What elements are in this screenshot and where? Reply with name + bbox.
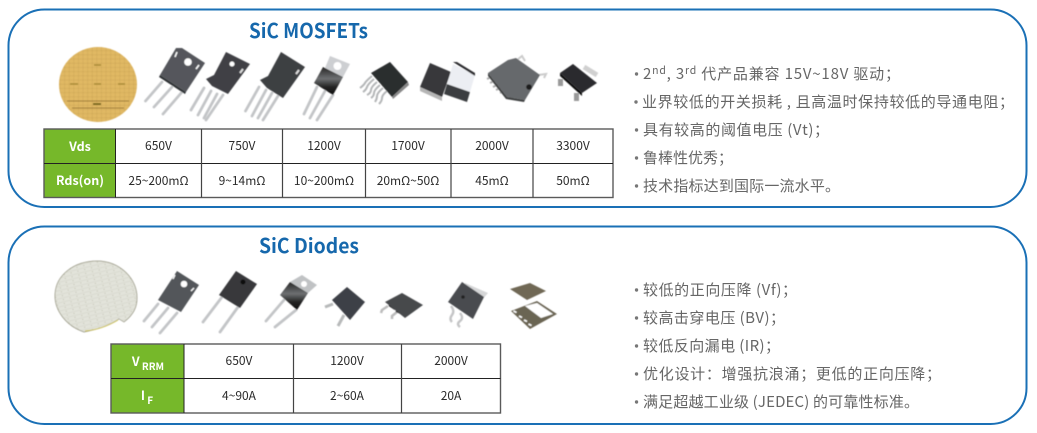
table: Vds and Rds(on): 25~200mΩ — [128, 172, 189, 189]
table: Vds and Rds(on): 2000V — [475, 137, 509, 154]
icon: TO-247 three-lead package — [146, 48, 205, 114]
table: Vds and Rds(on): 3300V — [556, 137, 590, 154]
icon: SOT-223 package — [558, 64, 597, 101]
icon: TO-247 diode two-lead — [203, 271, 257, 332]
table: VRRM and IF: 4~90A — [222, 387, 257, 404]
icon: TO-247 four-lead package A — [191, 52, 250, 120]
table: VRRM and IF: 1200V — [330, 352, 364, 369]
table: Vds and Rds(on): 50mΩ — [556, 172, 590, 189]
table: VRRM and IF: 2~60A — [330, 387, 365, 404]
icon: DPAK diode B — [381, 293, 423, 319]
heading: SiC Diodes: SiC Diodes — [259, 230, 359, 259]
text block: MOSFET features: rd — [685, 63, 696, 78]
heading: SiC MOSFETs: SiC MOSFETs — [249, 15, 368, 44]
table header: IF: F — [145, 392, 153, 407]
panel: SiC MOSFETs — [8, 10, 1026, 207]
text block: MOSFET features — [634, 63, 1014, 196]
table: Vds and Rds(on): 45mΩ — [475, 172, 509, 189]
table: Vds and Rds(on): 650V — [145, 137, 172, 154]
table: Vds and Rds(on) — [44, 129, 613, 198]
table: Vds and Rds(on): 750V — [229, 137, 256, 154]
text block: diode features — [635, 279, 941, 412]
icon: TO-220 diode — [266, 275, 317, 327]
icon: silver wafer — [55, 261, 137, 332]
table header: IF: I — [141, 385, 145, 404]
icon: DFN package top and bottom — [510, 283, 557, 329]
text block: MOSFET features: 2 — [643, 63, 651, 84]
table: VRRM and IF: 650V — [226, 352, 253, 369]
text block: diode features: 满足超越工业级 (JEDEC) 的可靠性标准。 — [643, 391, 919, 412]
text block: MOSFET features: 代产品兼容 15V~18V 驱动； — [697, 63, 900, 84]
text block: MOSFET features: , 3 — [667, 63, 684, 84]
text block: diode features: 较低反向漏电 (IR)； — [643, 335, 780, 356]
text block: MOSFET features: 具有较高的阈值电压 (Vt)； — [643, 119, 829, 140]
table header: VRRM: V — [132, 351, 140, 370]
text block: MOSFET features: 业界较低的开关损耗 , 且高温时保持较低的导通电阻； — [642, 91, 1014, 112]
table: VRRM and IF: 2000V — [434, 352, 468, 369]
icon: gold wafer — [59, 47, 137, 122]
icon: TOLL package — [487, 56, 546, 102]
icon: TO-263 package top and bottom — [420, 62, 475, 102]
panel: SiC Diodes — [8, 226, 1026, 424]
table: Vds and Rds(on): 9~14mΩ — [219, 172, 265, 189]
icon: D2PAK-7 package — [360, 62, 409, 104]
text block: MOSFET features: nd — [652, 63, 666, 78]
table: Vds and Rds(on): 1700V — [391, 137, 425, 154]
table header: VRRM: RRM — [140, 358, 164, 373]
icon: DPAK diode A — [325, 287, 365, 326]
text block: MOSFET features: 鲁棒性优秀； — [643, 147, 733, 168]
icon: TO-247 four-lead package B — [246, 52, 305, 120]
table header: Vds: Vds — [68, 136, 91, 155]
table header: Rds(on): Rds(on) — [56, 170, 104, 189]
text block: diode features: 较高击穿电压 (BV)； — [643, 307, 785, 328]
table: VRRM and IF: 20A — [441, 387, 462, 404]
table: Vds and Rds(on): 20mΩ~50Ω — [377, 172, 439, 189]
table: Vds and Rds(on): 10~200mΩ — [294, 172, 354, 189]
text block: MOSFET features: 技术指标达到国际一流水平。 — [643, 175, 840, 196]
icon: TO-247 diode three-lead — [144, 271, 199, 333]
table: VRRM and IF — [111, 344, 500, 413]
icon: TO-220 package — [304, 56, 350, 120]
text block: diode features: 优化设计：增强抗浪涌；更低的正向压降； — [643, 363, 941, 384]
icon: D2PAK diode — [448, 282, 488, 327]
table: Vds and Rds(on): 1200V — [307, 137, 341, 154]
text block: diode features: 较低的正向压降 (Vf)； — [643, 279, 797, 300]
